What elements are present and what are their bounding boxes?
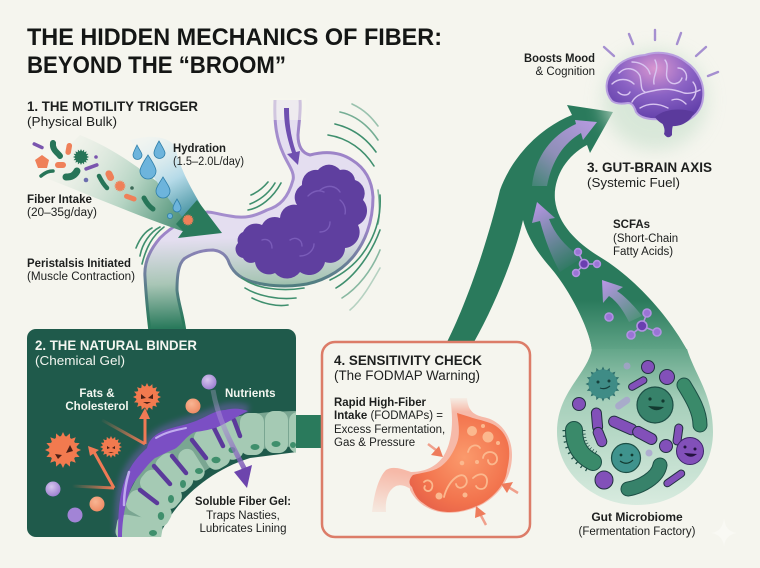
- sparkle watermark: [711, 518, 737, 546]
- fiber stream and arrow: [32, 135, 222, 238]
- label: soluble fiber gel: Lubricates Lining: [200, 523, 286, 535]
- arrow: green head: [176, 200, 222, 238]
- icon: spiky fat cells: [45, 383, 161, 468]
- molecule lower: [605, 309, 661, 339]
- warning text: Gas & Pressure: [334, 437, 415, 449]
- panel heading: (Chemical Gel): [35, 353, 125, 368]
- molecule upper: [573, 249, 600, 276]
- label: fiber intake: [27, 194, 97, 219]
- arrow: nutrient through gel: [213, 390, 252, 488]
- purple bulk mass: [236, 165, 367, 279]
- arrow: lower purple: [602, 280, 642, 322]
- title: THE HIDDEN MECHANICS OF FIBER:: [27, 24, 442, 51]
- label: hydration: (1.5–2.0L/day): [173, 156, 244, 168]
- label: fats and cholesterol: [65, 388, 129, 413]
- microbe: smiling teal: [612, 444, 640, 472]
- label: soluble fiber gel: Traps Nasties,: [206, 510, 280, 522]
- label: gut microbiome: Gut Microbiome: [591, 510, 683, 524]
- green axis band rising to brain: [447, 105, 700, 350]
- heading: (The FODMAP Warning): [334, 368, 480, 383]
- section 1 heading: 1. THE MOTILITY TRIGGER: [27, 98, 198, 114]
- panel heading: [35, 337, 197, 368]
- arrow: down into stomach: [284, 108, 300, 165]
- microbe: smiling purple: [676, 438, 704, 464]
- warning text: Intake (FODMAPs) =: [334, 410, 443, 422]
- light area below the lining: [158, 452, 297, 539]
- label: hydration: [173, 143, 244, 168]
- upper stomach: [136, 98, 380, 332]
- heading: [334, 352, 482, 383]
- microbe: hairy rod: [574, 430, 593, 462]
- title: BEYOND THE “BROOM”: [27, 52, 286, 79]
- section 3 heading: (Systemic Fuel): [587, 175, 680, 190]
- arrows: orange deflected: [72, 408, 150, 488]
- icon: balls: [46, 374, 216, 522]
- panel: sensitivity check: [322, 342, 530, 537]
- gel fingers: [140, 420, 240, 503]
- microbiome flask: [557, 349, 713, 505]
- icon: water drops: [133, 141, 181, 219]
- gel coating: [118, 409, 248, 537]
- warning text: Rapid High-Fiber: [334, 397, 427, 409]
- warning text: Excess Fermentation,: [334, 424, 445, 436]
- label: peristalsis: Peristalsis Initiated: [27, 258, 131, 270]
- label: boosts mood: & Cognition: [536, 66, 595, 78]
- label: fats and cholesterol: Cholesterol: [65, 401, 129, 413]
- motion arcs: [136, 104, 380, 310]
- lining base: [124, 411, 296, 518]
- nuclei: [149, 441, 296, 536]
- label: soluble fiber gel: Soluble Fiber Gel:: [195, 496, 291, 508]
- label: peristalsis: (Muscle Contraction): [27, 271, 135, 283]
- label: boosts mood: [524, 53, 595, 78]
- panel: natural binder: [27, 329, 311, 547]
- label: hydration: Hydration: [173, 143, 226, 155]
- label: boosts mood: Boosts Mood: [524, 53, 595, 65]
- connector band between panels: [290, 415, 330, 448]
- label: SCFAs: SCFAs: [613, 219, 650, 231]
- label: SCFAs: [613, 219, 678, 258]
- microbe: rods and cocci: [572, 360, 700, 489]
- faded particles: [614, 362, 652, 456]
- icon: fiber particles: [32, 142, 194, 226]
- label: fats and cholesterol: Fats &: [79, 388, 115, 400]
- section 3 heading: [587, 159, 712, 190]
- icon: brain: [603, 30, 718, 150]
- panel heading: 2. THE NATURAL BINDER: [35, 337, 197, 353]
- arrows: pressure: [428, 444, 518, 525]
- villi lining: [116, 411, 296, 537]
- label: nutrients: Nutrients: [225, 388, 275, 400]
- label: gut microbiome: [579, 510, 696, 538]
- gel glow: [120, 408, 248, 537]
- purple rising arrows and SCFA molecules: [532, 120, 661, 339]
- water stream: [130, 137, 205, 224]
- arrow: middle purple: [532, 202, 582, 272]
- label: gut microbiome: (Fermentation Factory): [579, 526, 696, 538]
- label: soluble fiber gel: [195, 496, 291, 535]
- label: peristalsis: [27, 258, 135, 283]
- section 1 heading: [27, 98, 198, 129]
- warning text: [334, 397, 445, 449]
- title: [27, 24, 442, 79]
- microbe: smiling green: [637, 387, 673, 423]
- icon: irritated stomach: [372, 396, 512, 513]
- label: SCFAs: (Short-Chain: [613, 233, 678, 245]
- microbe: spiky teal top left: [586, 366, 620, 402]
- bubbles and swirls: [436, 424, 500, 500]
- top fade: [270, 98, 306, 120]
- arrow: upper purple: [532, 120, 597, 186]
- heading: 4. SENSITIVITY CHECK: [334, 352, 482, 368]
- label: fiber intake: (20–35g/day): [27, 207, 97, 219]
- label: fiber intake: Fiber Intake: [27, 194, 92, 206]
- section 1 heading: (Physical Bulk): [27, 114, 117, 129]
- section 3 heading: 3. GUT-BRAIN AXIS: [587, 159, 712, 175]
- label: SCFAs: Fatty Acids): [613, 246, 673, 258]
